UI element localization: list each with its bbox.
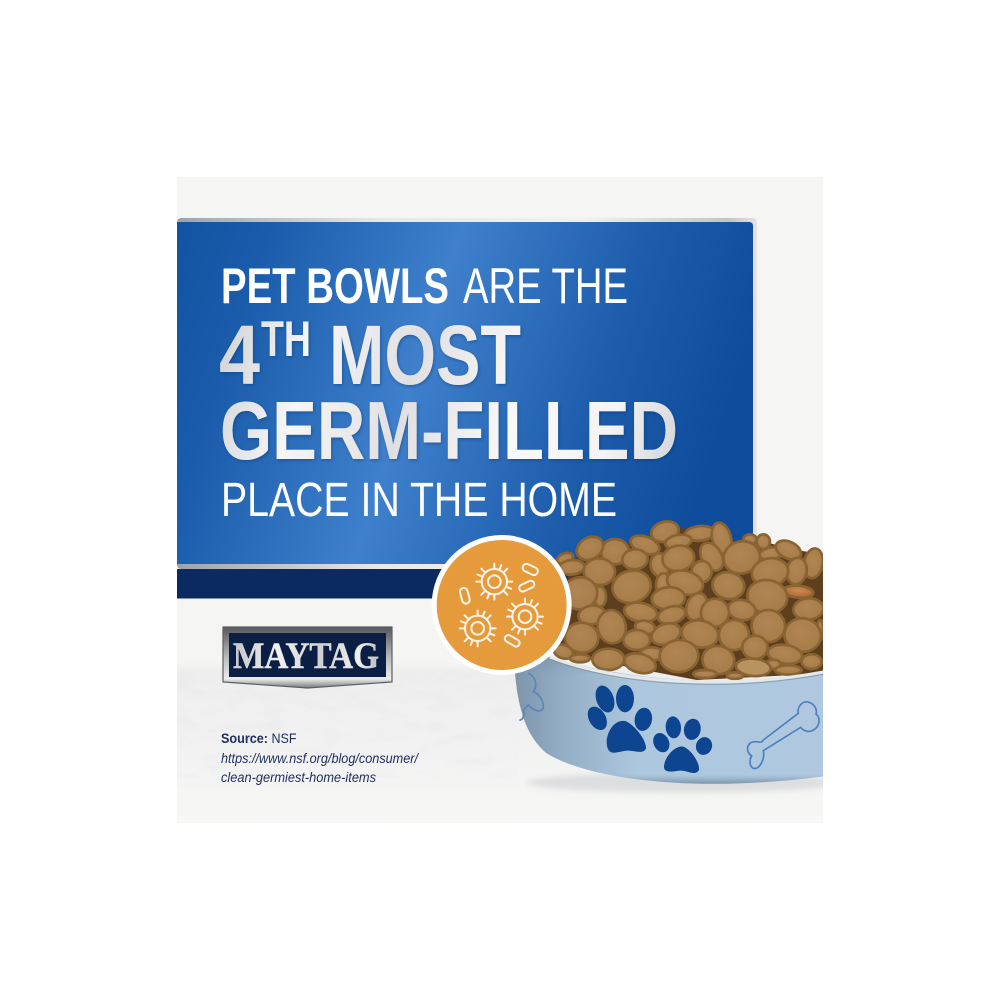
badge circle [432,535,572,675]
source text: Source: [221,731,268,746]
ground surface [177,662,823,823]
Maytag logo: MAYTAG [233,636,379,677]
headline text [219,258,678,527]
line: germ-filled: GERM-FILLED [220,384,678,477]
bacteria pills [459,563,539,648]
line: 4th most: TH [261,311,311,367]
bowl body [515,657,827,784]
line: 4th most: MOST [329,308,521,402]
line: pet bowls are the: ARE THE [463,258,628,314]
icon: bone outline left [519,673,543,720]
source text: NSF [272,731,296,746]
line: place in the home: PLACE IN THE HOME [221,474,617,527]
icon: bone outline right [748,702,819,768]
pet bowl with kibble [515,518,840,793]
germs [460,564,543,646]
bowl shadow [527,773,840,793]
panel: blue headline banner [177,218,757,598]
ground texture [177,668,517,778]
source text: https://www.nsf.org/blog/consumer/ [221,751,419,766]
background panel [177,177,823,823]
line: pet bowls are the: PET BOWLS [221,258,449,314]
Maytag logo [223,627,392,688]
infographic canvas [177,177,823,823]
source text: clean-germiest-home-items [221,770,376,785]
line: 4th most [219,308,521,402]
source text [221,731,419,785]
line: 4th most: 4 [219,308,260,402]
icon: germ badge [432,535,572,675]
kibble pile [552,518,827,680]
icon: large paw print [584,683,654,753]
icon: small paw print [650,716,715,773]
